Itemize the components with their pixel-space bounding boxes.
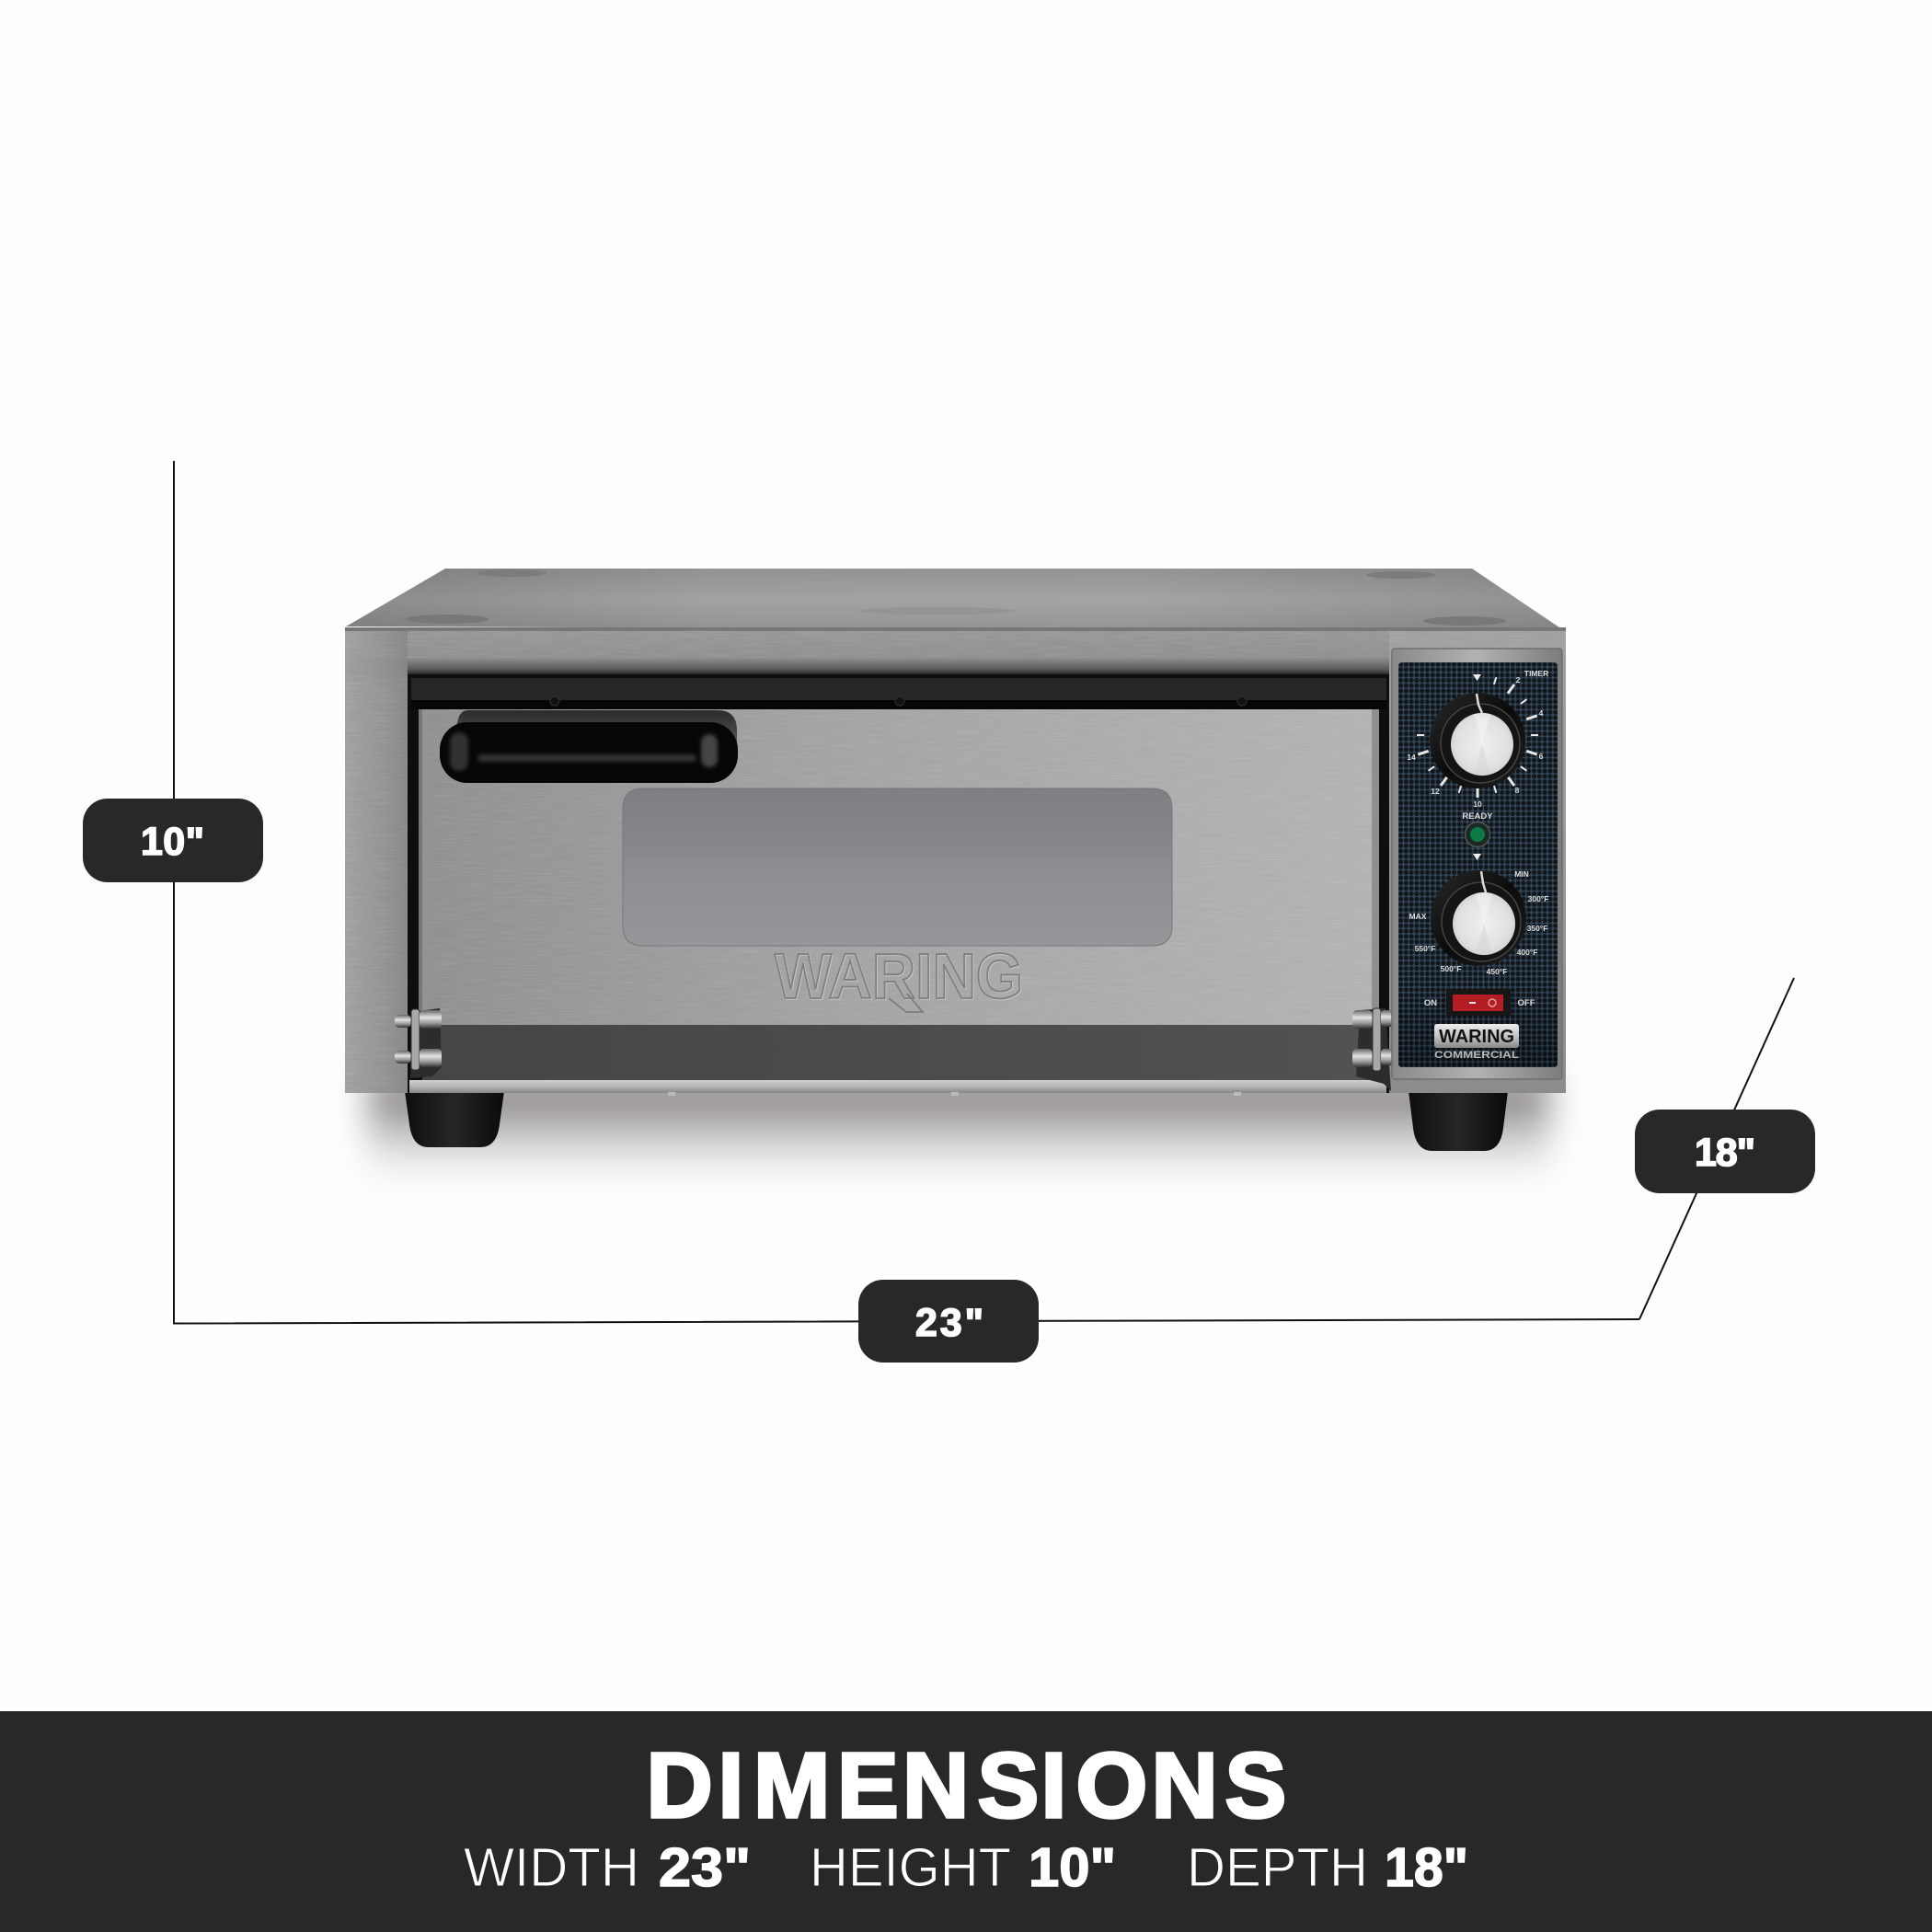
depth label: DEPTH [1187,1837,1368,1898]
bottom banner [0,1711,1932,1932]
height callout: 10" [141,820,204,864]
panel labels: 4 [1539,708,1544,718]
width label: WIDTH [464,1837,639,1898]
brand badge: COMMERCIAL [1434,1050,1519,1061]
embossed logo: WARING: WARING [776,941,1024,1013]
oven front body [345,627,1566,1093]
door recess [408,674,1389,1093]
ready indicator light [1465,822,1490,846]
floor shadow [368,1078,1550,1185]
door window [623,788,1172,946]
panel labels: 12 [1431,787,1440,796]
panel labels: MIN [1514,869,1529,879]
brand badge [1434,1024,1519,1061]
panel face [1398,662,1558,1067]
door lower band [422,1025,1382,1080]
pointer arrows [1473,674,1481,860]
right side face [1385,627,1566,1093]
dimension lines [174,461,1794,1323]
panel labels: 450°F [1487,967,1507,976]
right hinge [1352,1008,1398,1091]
door handle [440,710,738,783]
height and width line [174,461,1639,1323]
panel labels [1407,669,1548,1008]
panel frame [1392,649,1562,1079]
panel labels: 2 [1516,675,1521,684]
panel labels: MAX [1409,912,1427,921]
panel labels: 6 [1539,752,1544,761]
panel labels: 550°F [1415,944,1435,953]
panel labels: TIMER [1524,669,1548,678]
width label: 23" [659,1837,751,1898]
panel labels: 14 [1407,753,1416,762]
depth line [1639,978,1794,1319]
foot: right [1409,1091,1508,1151]
panel labels: 400°F [1517,948,1537,957]
width callout: 23" [915,1301,983,1345]
panel labels: READY [1462,811,1493,822]
oven top surface [346,569,1565,631]
foot: left [405,1091,504,1147]
left hinge [395,1008,442,1078]
depth callout: 18" [1695,1131,1755,1175]
timer knob [1430,693,1525,788]
width label [464,1837,751,1898]
width callout [858,1280,1039,1363]
title: DIMENSIONS [646,1734,1286,1837]
panel labels: ON [1424,998,1437,1008]
height label: 10" [1029,1837,1116,1898]
bottom trim [409,1080,1386,1096]
height callout [83,799,263,882]
power switch [1446,989,1511,1016]
embossed logo: WARING: WARING [775,940,1023,1012]
control panel [1392,649,1562,1079]
panel labels: OFF [1518,998,1535,1008]
product: pizza oven [345,569,1566,1185]
top front band [408,630,1389,676]
panel labels: 350°F [1527,924,1547,933]
door top channel [411,678,1386,709]
depth callout [1635,1110,1815,1193]
panel labels: 8 [1515,786,1520,795]
height label: HEIGHT [810,1837,1011,1898]
panel labels: 10 [1473,799,1482,809]
brand badge: WARING [1439,1027,1514,1047]
door panel [419,709,1379,1025]
panel labels: 500°F [1441,964,1461,973]
left side face [345,627,409,1093]
temperature knob [1431,870,1526,966]
height label [810,1837,1116,1898]
timer ticks [1417,677,1538,798]
panel labels: 300°F [1528,894,1548,903]
depth label [1187,1837,1468,1898]
depth label: 18" [1385,1837,1468,1898]
